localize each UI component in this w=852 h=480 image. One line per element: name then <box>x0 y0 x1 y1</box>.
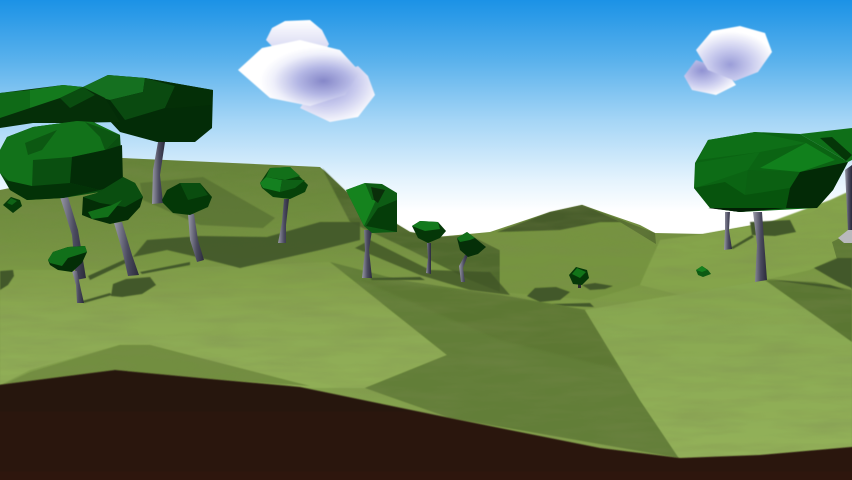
tree: small foreground left <box>48 246 87 303</box>
tree: small front with bent trunk <box>82 177 143 276</box>
ground: streaky grass texture <box>8 182 852 433</box>
soil foreground <box>0 370 852 480</box>
tree: middle small <box>412 221 446 274</box>
tree: front left large <box>0 121 123 280</box>
ground: grassy hills <box>0 158 852 480</box>
ground: right lit panel <box>585 280 852 460</box>
tree: middle smaller right <box>457 232 486 282</box>
ground: right upper lit slope <box>640 190 852 295</box>
cloud: large left cloud <box>238 20 375 122</box>
ground: darker foreground triangle <box>0 345 310 386</box>
tree: round with highlight <box>260 167 308 243</box>
sky <box>0 0 852 240</box>
tree: right big canopy with two trunks <box>694 132 848 282</box>
ground: central dark region <box>330 262 680 458</box>
tree: tiny mid-field <box>569 267 589 288</box>
ground: hilltop shade <box>497 205 625 232</box>
tree: tiny far left <box>3 197 22 213</box>
cloud: small right cloud <box>684 26 772 95</box>
ground: central upper lit slope <box>470 222 656 300</box>
tree: right far trunk <box>838 165 852 243</box>
tree: right far canopy <box>800 128 852 162</box>
ground: right dark fold <box>765 280 852 342</box>
tree: tiny bush <box>696 266 711 277</box>
shadow: middle slope <box>355 240 510 295</box>
shadow: blobs on ground <box>0 220 852 307</box>
shadow: hill cast shadow left <box>140 177 275 228</box>
shadow: big tree canopy shadow <box>133 222 360 268</box>
tree: dark round <box>162 183 212 262</box>
tree: central angular <box>346 183 397 278</box>
tree: left top canopy <box>0 85 120 128</box>
ground: shaded slope behind middle trees <box>322 168 500 292</box>
ground: lower left light panel <box>0 262 447 388</box>
tree: big back canopy with trunk <box>83 75 213 204</box>
ground: ridge shade <box>582 205 656 244</box>
